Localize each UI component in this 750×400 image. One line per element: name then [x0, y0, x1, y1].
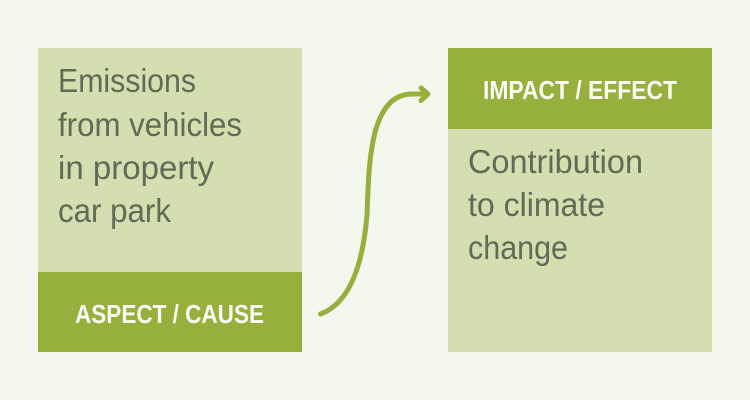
panel: aspect / cause: [38, 48, 302, 352]
text block: effect description: to climate: [468, 186, 605, 223]
panel: impact / effect: [448, 48, 712, 352]
heading band: impact / effect: [448, 48, 712, 129]
text block: cause description: in property: [58, 149, 214, 186]
text block: effect description: [468, 143, 643, 266]
text block: cause description: Emissions: [58, 62, 196, 99]
text block: effect description: Contribution: [468, 143, 643, 180]
text block: effect description: change: [468, 229, 568, 266]
text block: cause description: [58, 62, 242, 229]
arrow: cause to effect: [320, 88, 428, 314]
text block: cause description: car park: [58, 192, 171, 229]
heading band: aspect / cause: [38, 272, 302, 352]
text block: cause description: from vehicles: [58, 106, 242, 143]
heading band: aspect / cause: ASPECT / CAUSE: [75, 299, 264, 329]
heading band: impact / effect: IMPACT / EFFECT: [483, 75, 677, 105]
